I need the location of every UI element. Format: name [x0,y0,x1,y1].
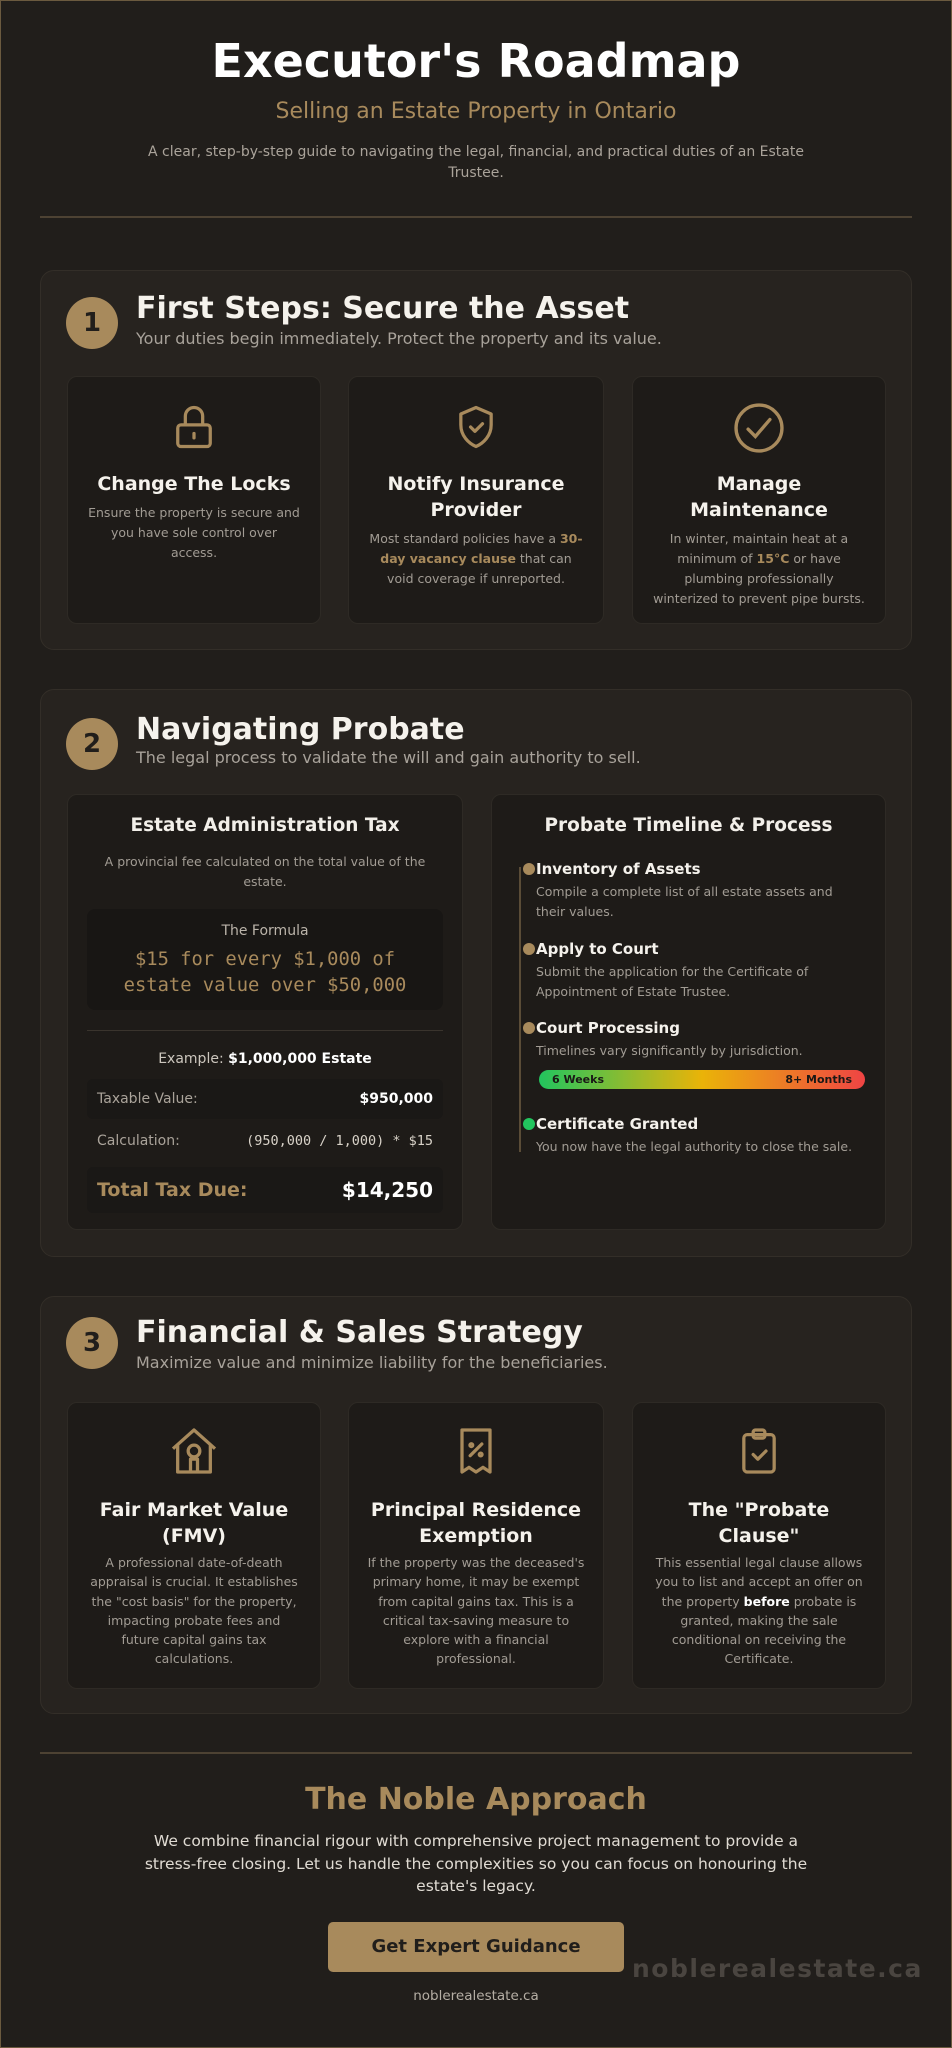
row total: $14,250 [342,1178,433,1202]
closing paragraph: We combine financial rigour with comprehensive project management to provide a stress-free closing. Let us handle the complexities so you can focus on honouring the estate's legacy. [145,1832,807,1895]
card: probate clause: This essential legal clause allows you to list and accept an offer on the property before probate is granted, making the sale conditional on receiving the Certificate. [655,1555,863,1666]
step: granted: Certificate Granted [536,1115,698,1133]
formula box: $15 for every $1,000 of [135,949,395,970]
row calculation [97,1133,433,1149]
card: FMV [67,1402,321,1689]
footer url: noblerealestate.ca [413,1988,539,2004]
card: insurance [348,376,604,624]
badge 2: 2 [83,729,101,759]
section 1 heading: First Steps: Secure the Asset [136,291,629,326]
card: maintenance: Manage Maintenance [690,473,828,521]
step: apply: Submit the application for the Certificate of Appointment of Estate Trustee. [536,964,808,999]
panel: probate timeline [491,794,886,1230]
intro text: A clear, step-by-step guide to navigating the legal, financial, and practical duties of an Estate Trustee. [148,144,804,181]
gradient bar: 8+ Months [785,1073,852,1086]
title: Executor's Roadmap [212,34,740,88]
step: apply [523,940,808,999]
section 1 subtitle: Your duties begin immediately. Protect the property and its value. [136,329,662,348]
card: maintenance [632,376,886,624]
example label: Example: $1,000,000 Estate [158,1051,372,1067]
icon: house [172,1428,216,1474]
watermark: noblerealestate.ca [632,1954,923,1983]
step: processing: Timelines vary significantly by jurisdiction. [536,1043,803,1058]
badge 3 [66,1317,118,1369]
section 3 subtitle: Maximize value and minimize liability for the beneficiaries. [136,1353,608,1372]
gradient bar [539,1070,865,1089]
formula box: The Formula [221,923,309,939]
panel: section 3 [40,1296,912,1714]
card: FMV: A professional date-of-death appraisal is crucial. It establishes the "cost basis" for the property, impacting probate fees and future capital gains tax calculations. [90,1555,298,1666]
closing heading: The Noble Approach [305,1782,647,1817]
card: principal residence [348,1402,604,1689]
row calculation: Calculation: [97,1133,180,1149]
row taxable: Taxable Value: [97,1091,198,1107]
subtitle: Selling an Estate Property in Ontario [276,99,676,124]
card: change locks: Ensure the property is secure and you have sole control over access. [88,505,300,560]
row total [87,1167,443,1213]
gradient bar: 6 Weeks [552,1073,604,1086]
button [328,1922,624,1972]
step: processing: Court Processing [536,1019,680,1037]
card: change locks: Change The Locks [97,473,291,495]
card: principal residence: If the property was the deceased's primary home, it may be exempt from capital gains tax. This is a critical tax-saving measure to explore with a financial professional. [368,1555,584,1666]
step: inventory: Inventory of Assets [536,860,701,878]
step: processing [523,1019,803,1058]
card: maintenance: In winter, maintain heat at a minimum of 15°C or have plumbing professionally winterized to prevent pipe bursts. [653,531,865,606]
badge 3: 3 [83,1328,101,1358]
card: change locks [67,376,321,624]
row taxable: $950,000 [359,1091,433,1107]
panel: section 1 [40,270,912,650]
icon: lock [176,406,212,448]
formula box [87,909,443,1010]
card: insurance: Most standard policies have a 30-day vacancy clause that can void coverage if unreported. [369,531,583,586]
card: FMV: Fair Market Value (FMV) [100,1499,288,1547]
panel: section 2 [40,689,912,1257]
icon: clipboard check [742,1428,776,1474]
badge 2 [66,718,118,770]
icon: receipt percent [460,1428,492,1474]
icon: shield [459,406,493,448]
icon: check circle [734,403,784,453]
row calculation: (950,000 / 1,000) * $15 [246,1133,433,1149]
step: inventory [523,860,833,919]
step: apply: Apply to Court [536,940,658,958]
button: Get Expert Guidance [371,1936,581,1957]
timeline heading: Probate Timeline & Process [544,815,833,836]
row total: Total Tax Due: [97,1179,248,1201]
card: probate clause [632,1402,886,1689]
badge 1 [66,297,118,349]
card: insurance: Notify Insurance Provider [387,473,565,521]
step: granted [523,1115,852,1154]
formula box: estate value over $50,000 [124,974,406,996]
section 3 heading: Financial & Sales Strategy [136,1315,583,1350]
panel: estate administration tax [67,794,463,1230]
row taxable [87,1079,443,1119]
tax heading: Estate Administration Tax [130,815,400,836]
card: probate clause: The "Probate Clause" [689,1499,829,1547]
badge 1: 1 [83,308,101,338]
section 2 heading: Navigating Probate [136,712,465,747]
card: principal residence: Principal Residence Exemption [371,1499,581,1547]
section 2 subtitle: The legal process to validate the will and gain authority to sell. [136,748,641,767]
step: granted: You now have the legal authority to close the sale. [536,1139,852,1154]
tax description: A provincial fee calculated on the total value of the estate. [105,854,425,889]
step: inventory: Compile a complete list of all estate assets and their values. [536,884,833,919]
